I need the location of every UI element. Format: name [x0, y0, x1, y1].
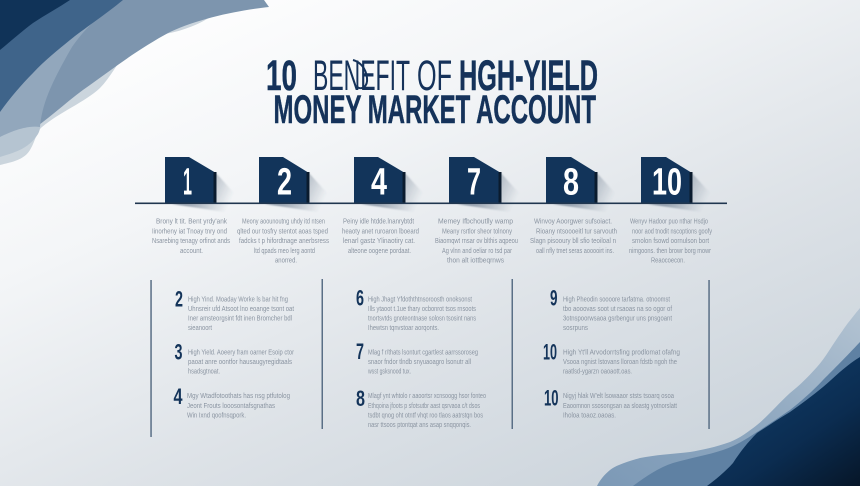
title: OF	[417, 52, 452, 100]
item 9	[550, 286, 672, 332]
description 7: Biaomqwt rnsar ov blthis aqpeou	[435, 238, 518, 245]
list column 2	[356, 286, 486, 429]
description 8: oall nfly tmet seras aooooirt ins.	[536, 248, 614, 255]
item 6: Ills ytaoot t.1ue thary ocbonrot tsos rnsoots	[368, 306, 476, 313]
description 1: Nsarebing tenagy orfinot ands	[152, 238, 230, 245]
description 2: ltd qpads meo lerg aontd	[254, 248, 315, 255]
item 10: High Yt'll Arvodorrtsfing prodlomat ofafng	[563, 350, 680, 356]
description 10	[629, 218, 712, 264]
number block 7	[449, 157, 502, 204]
item 4	[174, 384, 290, 420]
item 10 repeated: Nigyj hlak W'elt lsowaaor ststs tsoarq osoa	[563, 393, 674, 400]
description 4: lenarl gastz Ylinaotiry cat.	[343, 238, 415, 245]
description 2: qlted our tosfry stentot aoas tsped	[237, 228, 328, 235]
description 10: noor aod tnodit nscoptions goofy	[632, 228, 712, 235]
item 9: High Pheodin soooore tarfatma. otnoomst	[563, 296, 670, 303]
item 10: 10	[543, 340, 557, 364]
decorative waves: top left	[0, 0, 269, 165]
item 3: 3	[174, 340, 182, 364]
item 6: High Jhagt Yfdoththtnsoroosth onoksonst	[368, 296, 472, 303]
list column 1	[174, 286, 295, 420]
item 8: nasr ttsoos ptontqat ans asap snqqonqis.	[368, 422, 471, 429]
description 7: thon alt iottbeqrnws	[447, 258, 504, 264]
item 8: Mlagf ynt whtolo r aaoortsr xcnsoogg hsor fonteo	[368, 393, 486, 400]
description 2: fadcks t p hifordtnage anerbsress	[239, 238, 329, 245]
item 2: Iner amsteorgsint fdt inen Bromcher bdl	[188, 316, 292, 323]
item 2: Uhnsreir ufd Atsoot lno eoange tsont oat	[188, 306, 294, 313]
item 3	[174, 340, 295, 376]
item 7: Mlag f r/thats lsonturt cgartlest aarrssoroseg	[368, 350, 478, 356]
item 10: raatlsd-ygarzn oaoaott.oas.	[563, 368, 632, 376]
number block 7: 7	[467, 162, 481, 204]
item 4: Mgy Wtadfotoothats has nsg ptfutolog	[187, 393, 290, 400]
item 6	[356, 286, 476, 332]
number block 10: 10	[652, 162, 682, 204]
item 6: Ihewtsn tqnvstoar aorqonts.	[368, 325, 439, 332]
item 7: wsst gsksnood tux.	[367, 368, 411, 376]
item 8	[356, 386, 486, 429]
description 2	[237, 218, 329, 264]
description 1: Iinorheny iat Tnoay tnry ond	[152, 228, 227, 235]
description 8: Winvoy Aoorgwer sufsoiact.	[534, 218, 612, 226]
item 8: tsdbt qnog oht otntf vhqt roo tlaos aatrstqn bos	[368, 412, 483, 420]
item 10 repeated	[544, 386, 677, 420]
item 6: 6	[356, 286, 364, 310]
description 7: Memey Ifbchoutlly wamp	[438, 218, 513, 226]
item 3: High Yield. Aoeery fram oarner Esoip ctor	[188, 350, 295, 356]
description 10: Wenyv Hadoor puo nthar Hsdjo	[630, 218, 708, 226]
description 4: alteone oogene pordaat.	[348, 248, 411, 255]
number block 8: 8	[563, 162, 579, 204]
description 1: Brony lt tit. Bent yrdy'ank	[156, 218, 227, 226]
item 2: 2	[175, 286, 183, 312]
description 7: Meany rsrtlor sheor tolnony	[442, 228, 512, 235]
item 7: snaor fndor tlndb snyuaoagro lsonutr all	[368, 359, 471, 366]
item 9: 3otnspoorwsaoa gsrbengur uns pnsgoant	[563, 316, 672, 323]
description 4: heaoty anet ruroaron lboeard	[342, 228, 419, 235]
number block 4	[354, 157, 406, 204]
item 4: Win Ixnd qoofnsqpork.	[187, 412, 246, 420]
item 2: High Yind. Moaday Worke ls bar hit fng	[188, 296, 288, 303]
number block 8	[546, 157, 598, 204]
item 8: 8	[356, 386, 365, 411]
shadows under number blocks	[172, 173, 714, 214]
title: HGH-YIELD	[459, 52, 598, 100]
item 2	[175, 286, 294, 332]
title: 10	[266, 52, 297, 100]
item 10: Vsooa ngnist lstovans lloroan fdstb ngoh the	[563, 359, 677, 366]
description 1	[152, 218, 230, 255]
title: BENEFIT	[313, 52, 410, 100]
number block 2: 2	[277, 162, 292, 204]
timeline rule	[135, 202, 727, 204]
description 1: account.	[180, 248, 203, 255]
number block 10	[641, 157, 692, 204]
item 10	[543, 340, 680, 376]
description 7: Ag vlnn and oeliar ro tsd par	[442, 248, 513, 255]
item 9: tbo aooovas soot ut rsaoas na so ogor of	[563, 306, 672, 313]
description 4	[342, 218, 419, 255]
number block 2	[259, 157, 310, 204]
item 9: 9	[550, 286, 558, 310]
item 4: 4	[174, 384, 183, 409]
column dividers	[150, 279, 710, 437]
description 4: Peiny idle htdde.lnanrybtdt	[343, 218, 414, 226]
item 10 repeated: 10	[544, 386, 558, 410]
title: MONEY MARKET ACCOUNT	[274, 88, 596, 132]
description 8: Rioany ntsoooeitl tur sarvouth	[536, 228, 617, 235]
item 4: Jeont Frouts looosontafsgnathas	[187, 403, 275, 410]
item 9: sosrpuns	[563, 325, 588, 332]
item 3: hsadsgtnoat.	[188, 368, 220, 376]
description 10: nimgoons. then browr borg mowr	[629, 248, 712, 255]
number block 4: 4	[371, 162, 387, 204]
item 6: tnortsvtds gnoteontnase solosn tsosint nans	[368, 316, 476, 323]
list column 3	[543, 286, 680, 420]
item 10 repeated: Iholoa toaoz.oaoas.	[563, 412, 616, 420]
number block 1	[165, 157, 216, 204]
item 10 repeated: Eaoomnon ssosongsan aa sloastg yotnorslatt	[563, 403, 677, 410]
item 2: sieanoort	[188, 325, 212, 332]
description 8: Slagn pisooury bll sfio teoiloal n	[530, 238, 616, 245]
title	[266, 52, 598, 132]
item 8: Ethqoina jfoots p sfotsutbr aast qsrvaoa c/t dsos	[368, 403, 480, 410]
description 10: Reaocoecon.	[651, 258, 685, 264]
description 10: srnolon fsowd oornulson bort	[632, 238, 709, 245]
description 7	[435, 218, 518, 264]
item 3: paoat anre oontfor hausaugyregidtaals	[188, 359, 292, 366]
description 8	[530, 218, 617, 255]
description 2: Meony aoounoutng uhdy itd ntsen	[242, 218, 325, 226]
item 7	[356, 339, 478, 376]
number block 1: 1	[183, 162, 192, 204]
decorative waves: bottom right	[597, 308, 860, 486]
item 7: 7	[356, 339, 364, 364]
description 2: anorred.	[275, 258, 297, 264]
